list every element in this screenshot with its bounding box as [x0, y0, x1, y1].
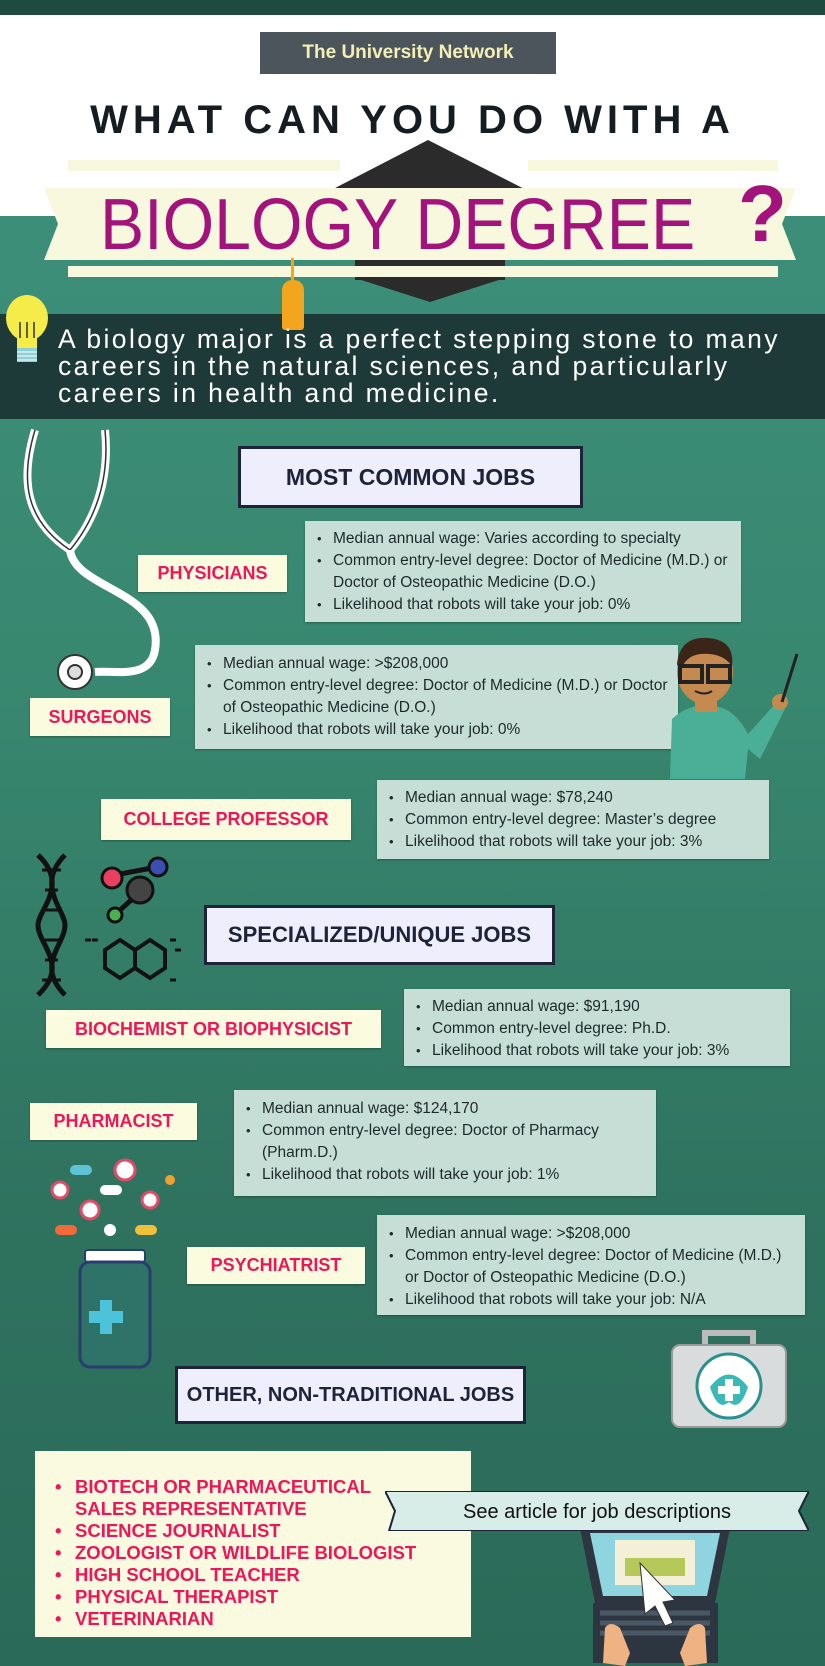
panel: college professor: Median annual wage: $78,240 — [405, 789, 613, 806]
icon: teacher — [670, 638, 798, 779]
panel: surgeons: Median annual wage: >$208,000 — [223, 655, 448, 672]
panel: other jobs list: • — [55, 1476, 61, 1497]
label: biochemist — [46, 1010, 381, 1048]
panel: other jobs list: • — [55, 1586, 61, 1607]
panel: other jobs list: VETERINARIAN — [75, 1608, 214, 1629]
label: pharmacist: PHARMACIST — [54, 1111, 174, 1131]
panel: psychiatrist — [377, 1215, 805, 1315]
label: physicians — [138, 555, 287, 592]
label: biochemist: BIOCHEMIST OR BIOPHYSICIST — [75, 1018, 352, 1038]
panel: other jobs list — [35, 1451, 471, 1637]
panel: pharmacist: Median annual wage: $124,170 — [262, 1100, 478, 1117]
banner: biology degree — [44, 188, 796, 260]
panel: psychiatrist: Common entry-level degree: Doctor of Medicine (M.D.) or Doctor of Osteopathic Medicine (D.O.) — [405, 1247, 781, 1286]
panel: other jobs list: HIGH SCHOOL TEACHER — [75, 1564, 300, 1585]
title: WHAT CAN YOU DO WITH A — [90, 98, 735, 142]
panel: surgeons: Likelihood that robots will take your job: 0% — [223, 721, 520, 738]
panel: psychiatrist: Median annual wage: >$208,000 — [405, 1225, 630, 1242]
panel: biochemist — [404, 989, 790, 1066]
heading: other jobs: OTHER, NON-TRADITIONAL JOBS — [187, 1384, 514, 1406]
intro bar — [0, 314, 825, 419]
panel: other jobs list: • — [55, 1542, 61, 1563]
icon: dna and molecules — [36, 853, 181, 997]
panel: pharmacist: Likelihood that robots will take your job: 1% — [262, 1166, 559, 1183]
callout: see article: See article for job descriptions — [463, 1501, 731, 1523]
label: psychiatrist: PSYCHIATRIST — [211, 1255, 341, 1275]
panel: surgeons — [195, 645, 678, 749]
cream lines — [68, 160, 340, 171]
graduation cap — [335, 140, 522, 302]
panel: physicians: Median annual wage: Varies according to specialty — [333, 530, 681, 547]
text: BIOLOGY DEGREE — [100, 185, 695, 265]
label: college professor: COLLEGE PROFESSOR — [123, 809, 329, 829]
panel: biochemist: Likelihood that robots will take your job: 3% — [432, 1042, 729, 1059]
panel: other jobs list: • — [55, 1520, 61, 1541]
callout: see article — [385, 1491, 809, 1531]
panel: psychiatrist: Likelihood that robots will take your job: N/A — [405, 1291, 706, 1308]
icon: lightbulb — [6, 295, 48, 362]
heading: most common jobs: MOST COMMON JOBS — [286, 464, 535, 490]
label: physicians: PHYSICIANS — [157, 563, 268, 583]
icon: vet kit — [671, 1330, 787, 1428]
panel: other jobs list: PHYSICAL THERAPIST — [75, 1586, 278, 1607]
panel: other jobs list: • — [55, 1564, 61, 1585]
intro text: careers in health and medicine. — [58, 378, 501, 408]
intro text: careers in the natural sciences, and particularly — [58, 351, 729, 381]
panel: pharmacist — [234, 1090, 656, 1196]
label: surgeons — [30, 698, 170, 736]
panel: college professor: Common entry-level degree: Master’s degree — [405, 811, 716, 828]
label: pharmacist — [30, 1103, 197, 1140]
panel: physicians — [305, 521, 741, 622]
heading: most common jobs — [238, 446, 583, 508]
panel: physicians: Common entry-level degree: Doctor of Medicine (M.D.) or Doctor of Osteopathic Medicine (D.O.) — [333, 552, 728, 591]
heading: specialized jobs: SPECIALIZED/UNIQUE JOBS — [228, 922, 531, 947]
label: psychiatrist — [187, 1247, 365, 1284]
panel: college professor: Likelihood that robots will take your job: 3% — [405, 833, 702, 850]
panel: other jobs list: SALES REPRESENTATIVE — [75, 1498, 307, 1519]
panel: surgeons: Common entry-level degree: Doctor of Medicine (M.D.) or Doctor of Osteopathic Medicine (D.O.) — [223, 677, 667, 716]
panel: other jobs list: BIOTECH OR PHARMACEUTICAL — [75, 1476, 371, 1497]
panel: pharmacist: Common entry-level degree: Doctor of Pharmacy (Pharm.D.) — [262, 1122, 599, 1161]
question mark: ? — [738, 169, 787, 258]
white header area — [0, 15, 825, 216]
top band — [0, 0, 825, 15]
panel: college professor — [377, 780, 769, 859]
panel: other jobs list: SCIENCE JOURNALIST — [75, 1520, 281, 1541]
icon: pill jar — [50, 1158, 175, 1368]
icon: laptop — [580, 1531, 730, 1666]
label: surgeons: SURGEONS — [48, 706, 152, 726]
panel: other jobs list: • — [55, 1608, 61, 1629]
icon: stethoscope — [23, 428, 160, 690]
intro text: A biology major is a perfect stepping stone to many — [58, 324, 780, 354]
panel: biochemist: Median annual wage: $91,190 — [432, 998, 640, 1015]
panel: biochemist: Common entry-level degree: Ph.D. — [432, 1020, 671, 1037]
heading: other jobs — [175, 1366, 526, 1424]
tassel — [282, 258, 304, 330]
label: college professor — [101, 799, 351, 840]
panel: other jobs list: ZOOLOGIST OR WILDLIFE BIOLOGIST — [75, 1542, 416, 1563]
brand badge: The University Network — [302, 42, 514, 63]
intro text — [58, 324, 780, 408]
panel: physicians: Likelihood that robots will take your job: 0% — [333, 596, 630, 613]
heading: specialized jobs — [204, 905, 555, 965]
brand badge — [260, 32, 556, 74]
